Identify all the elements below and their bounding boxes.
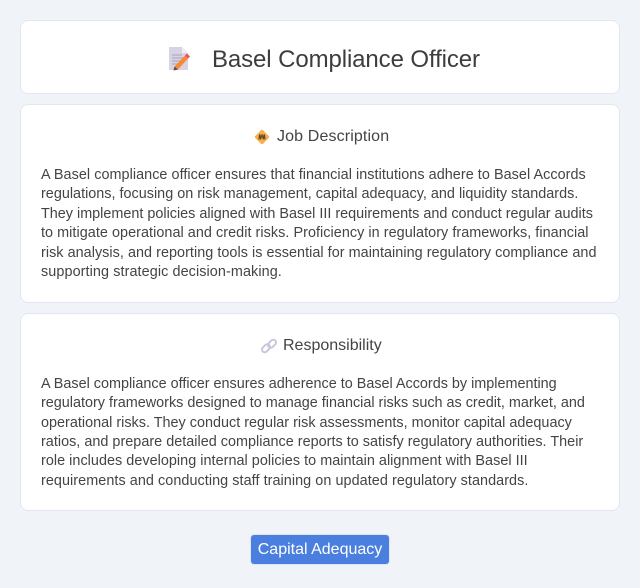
badge: capital adequacy (251, 535, 389, 564)
text block: responsibility: requirements and conducting staff training on updated regulatory standards. (41, 473, 528, 489)
text block: job description: They implement policies aligned with Basel III requirements and conduct regular audits (41, 206, 593, 222)
icon: chain link (261, 338, 277, 354)
icon: diamond sign (254, 130, 270, 144)
text block: responsibility (41, 376, 585, 489)
text block: responsibility: A Basel compliance officer ensures adherence to Basel Accords by implementing (41, 376, 557, 392)
text block: job description (41, 167, 596, 280)
heading: job description: Job Description (277, 128, 389, 145)
text block: job description: to mitigate operational and credit risks. Proficiency in regulatory frameworks, financial (41, 225, 589, 241)
badge: capital adequacy: Capital Adequacy (258, 541, 382, 558)
text block: responsibility: regulatory frameworks designed to manage financial risks such as credit, market, and (41, 395, 585, 411)
title: Basel Compliance Officer (212, 46, 480, 73)
icon: document with pencil (169, 47, 190, 70)
text block: job description: risk analysis, and reporting tools is essential for maintaining regulatory compliance and (41, 245, 596, 261)
text block: job description: supporting strategic decision-making. (41, 264, 282, 280)
text block: responsibility: operational risks. They conduct regular risk assessments, monitor capital adequacy (41, 415, 572, 431)
text block: job description: A Basel compliance officer ensures that financial institutions adhere to Basel Accords (41, 167, 586, 183)
text block: responsibility: role includes developing internal policies to maintain alignment with Basel III (41, 453, 528, 469)
panel: title card (20, 20, 620, 94)
text block: responsibility: ratios, and prepare detailed compliance reports to satisfy regulatory authorities. Their (41, 434, 583, 450)
panel: responsibility (20, 313, 620, 511)
text block: job description: regulations, focusing on risk management, capital adequacy, and liquidity standards. (41, 186, 578, 202)
panel: job description (20, 104, 620, 303)
heading: responsibility: Responsibility (283, 337, 382, 354)
